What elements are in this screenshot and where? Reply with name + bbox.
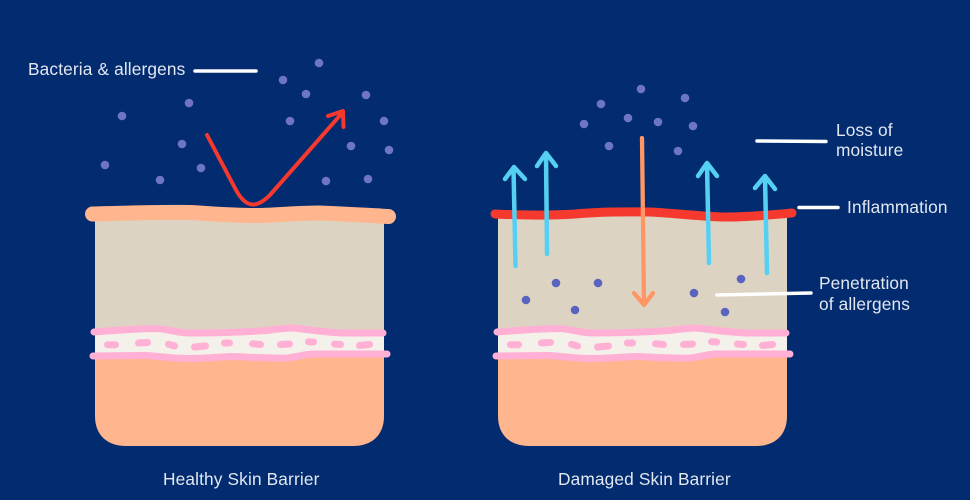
healthy upper pink line	[94, 328, 383, 333]
damaged inflamed top layer	[495, 212, 792, 217]
label: penetration of allergens: of allergens	[819, 294, 910, 314]
healthy white cell layer	[95, 330, 384, 358]
label: bacteria and allergens: Bacteria & allergens	[28, 59, 186, 79]
damaged white cell layer	[498, 330, 787, 358]
heading: damaged skin barrier: Damaged Skin Barrier	[558, 469, 731, 489]
healthy lower pink line	[93, 354, 387, 358]
arrow: allergens penetrating	[634, 138, 653, 305]
allergens: above damaged skin	[580, 85, 697, 155]
label: penetration of allergens	[717, 273, 910, 314]
healthy top skin layer	[92, 212, 388, 216]
allergens: inside damaged skin	[522, 275, 745, 316]
healthy lower tissue layer	[95, 356, 384, 446]
healthy epidermis layer	[95, 215, 384, 335]
label: loss of moisture	[757, 120, 903, 160]
label: inflammation: Inflammation	[847, 197, 948, 217]
heading: healthy skin barrier: Healthy Skin Barrier	[163, 469, 320, 489]
label: penetration of allergens: Penetration	[819, 273, 909, 293]
arrows: moisture loss	[505, 153, 775, 273]
healthy cell dashes	[108, 342, 370, 347]
damaged epidermis layer	[498, 214, 787, 335]
allergens: healthy side	[101, 59, 393, 185]
damaged cell dashes	[510, 342, 772, 347]
damaged upper pink line	[497, 328, 786, 333]
panel: healthy skin barrier	[92, 212, 388, 446]
damaged lower pink line	[496, 354, 790, 358]
damaged lower tissue layer	[498, 356, 787, 446]
label: loss of moisture: Loss of	[836, 120, 893, 140]
label: loss of moisture: moisture	[836, 140, 903, 160]
panel: damaged skin barrier	[495, 212, 792, 446]
arrow: deflected red arrow	[207, 111, 344, 205]
